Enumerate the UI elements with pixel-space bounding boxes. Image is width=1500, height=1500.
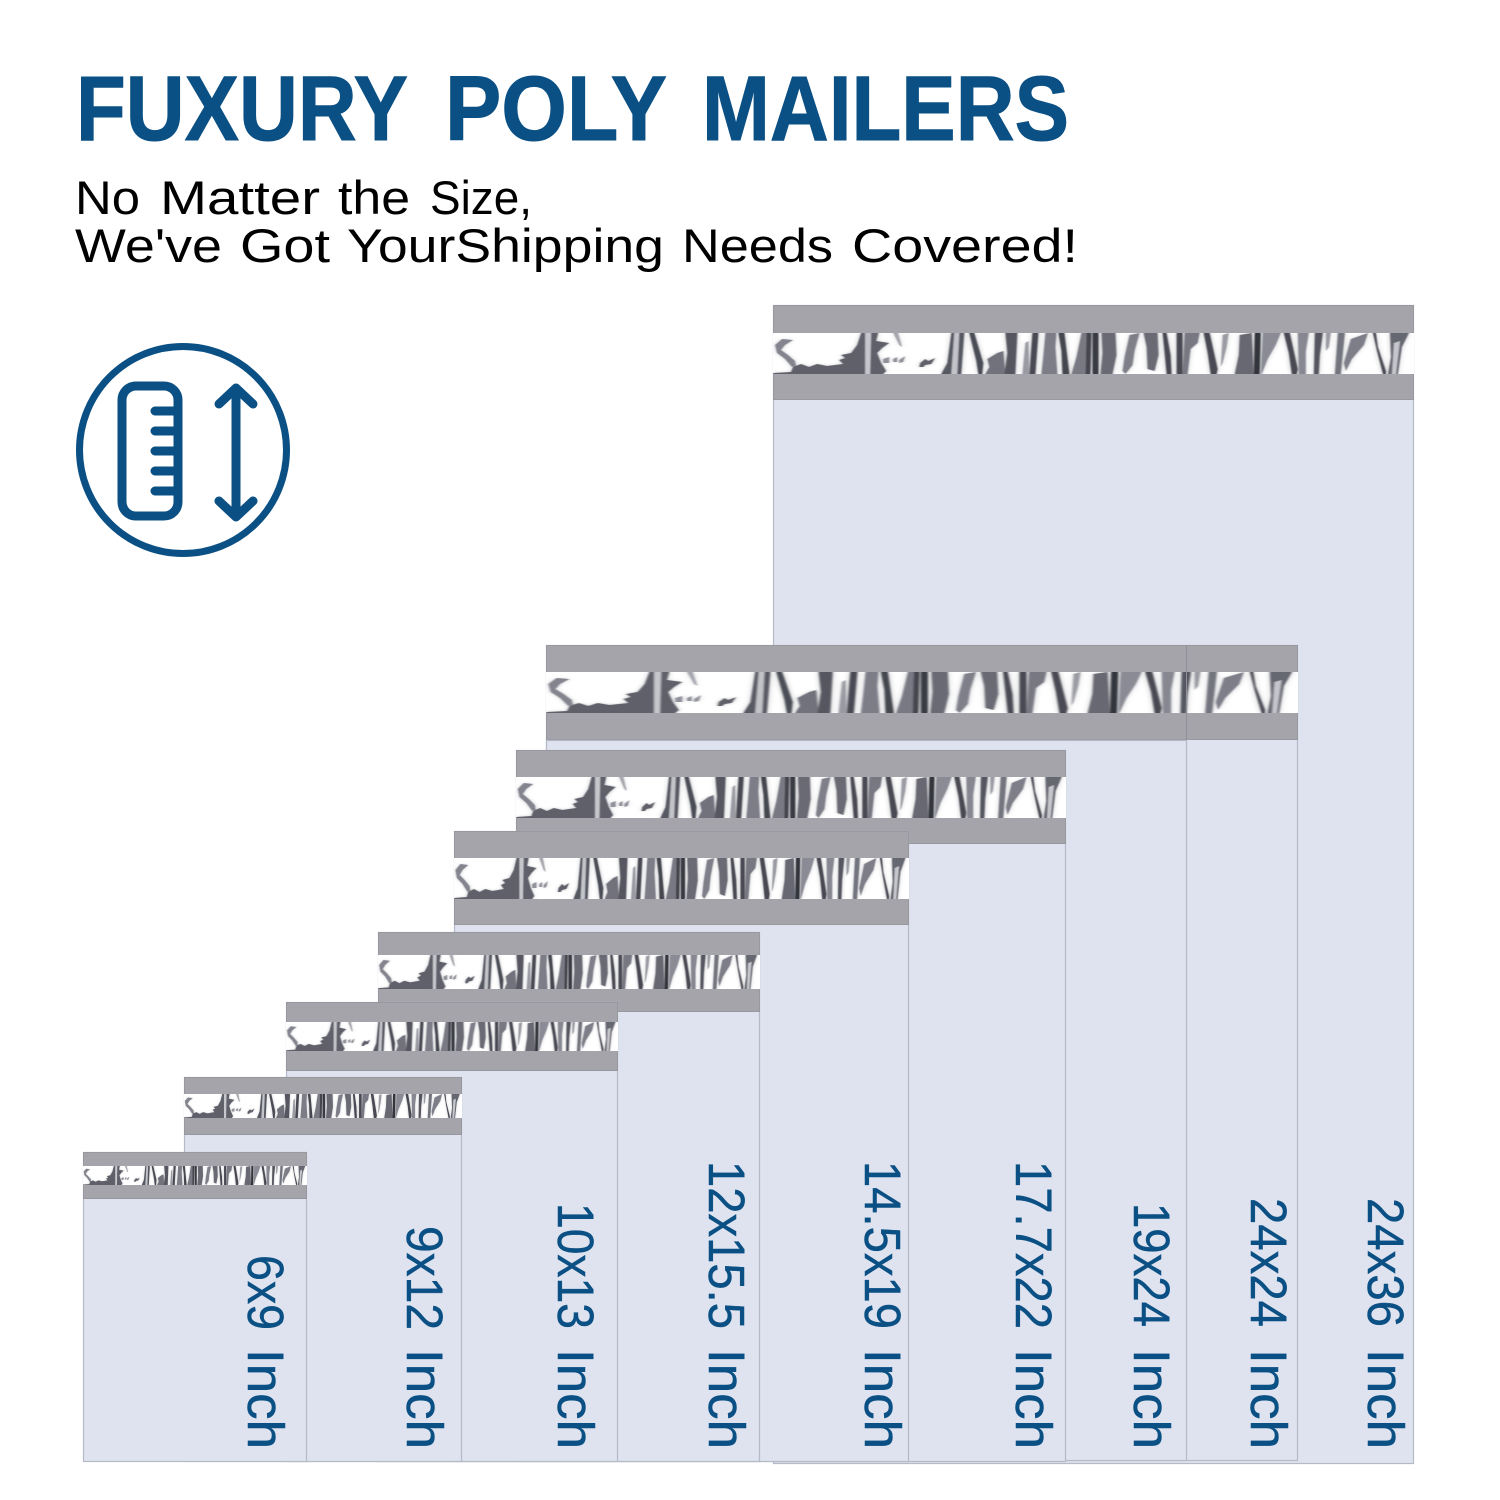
mailer: 10x13 Inch: 10x13 — [547, 1203, 604, 1329]
mailer: 14.5x19 Inch — [454, 832, 911, 1462]
mailer: 17.7x22 Inch: 17.7x22 — [1005, 1161, 1062, 1329]
subtitle: We've — [75, 219, 222, 272]
title: FUXURY — [76, 58, 408, 160]
title: POLY — [445, 58, 667, 160]
mailer: 6x9 Inch: 6x9 — [237, 1255, 294, 1330]
mailer: 24x36 Inch: Inch — [1357, 1349, 1414, 1449]
subtitle: Covered! — [852, 219, 1078, 272]
subtitle: No — [75, 171, 140, 224]
mailer: 19x24 Inch — [546, 645, 1186, 1460]
title: MAILERS — [702, 58, 1069, 160]
subtitle: Got — [240, 219, 330, 272]
mailer: 24x36 Inch: 24x36 — [1357, 1198, 1414, 1327]
mailer: 10x13 Inch — [286, 1002, 618, 1462]
mailer: 19x24 Inch: Inch — [1123, 1349, 1180, 1449]
icon: ruler and height arrow — [80, 346, 286, 554]
mailer: 24x24 Inch: 24x24 — [1240, 1198, 1297, 1327]
mailer: 19x24 Inch: 19x24 — [1123, 1203, 1180, 1327]
mailer: 24x24 Inch: Inch — [1240, 1349, 1297, 1449]
mailer: 17.7x22 Inch: Inch — [1005, 1349, 1062, 1449]
mailer: 14.5x19 Inch: Inch — [854, 1349, 911, 1449]
mailer: 12x15.5 Inch: 12x15.5 — [698, 1161, 755, 1329]
mailer: 24x36 Inch — [773, 306, 1414, 1464]
mailer: 10x13 Inch: Inch — [547, 1349, 604, 1449]
subtitle: Size, — [430, 171, 532, 224]
subtitle: YourShipping — [347, 219, 664, 272]
mailer: 6x9 Inch: Inch — [237, 1349, 294, 1449]
mailer: 9x12 Inch: 9x12 — [396, 1226, 453, 1330]
title — [76, 58, 1069, 160]
mailer: 6x9 Inch — [83, 1152, 307, 1462]
mailer: 14.5x19 Inch: 14.5x19 — [854, 1161, 911, 1329]
mailer: 24x24 Inch — [546, 646, 1298, 1460]
mailer: 9x12 Inch: Inch — [396, 1349, 453, 1449]
subtitle — [75, 171, 1078, 272]
subtitle: Needs — [682, 219, 833, 272]
mailer: 17.7x22 Inch — [516, 750, 1066, 1462]
subtitle: the — [338, 171, 410, 224]
mailer: 12x15.5 Inch: Inch — [698, 1349, 755, 1449]
subtitle: Matter — [160, 171, 320, 224]
mailer: 12x15.5 Inch — [378, 932, 760, 1462]
mailer: 9x12 Inch — [184, 1078, 462, 1462]
